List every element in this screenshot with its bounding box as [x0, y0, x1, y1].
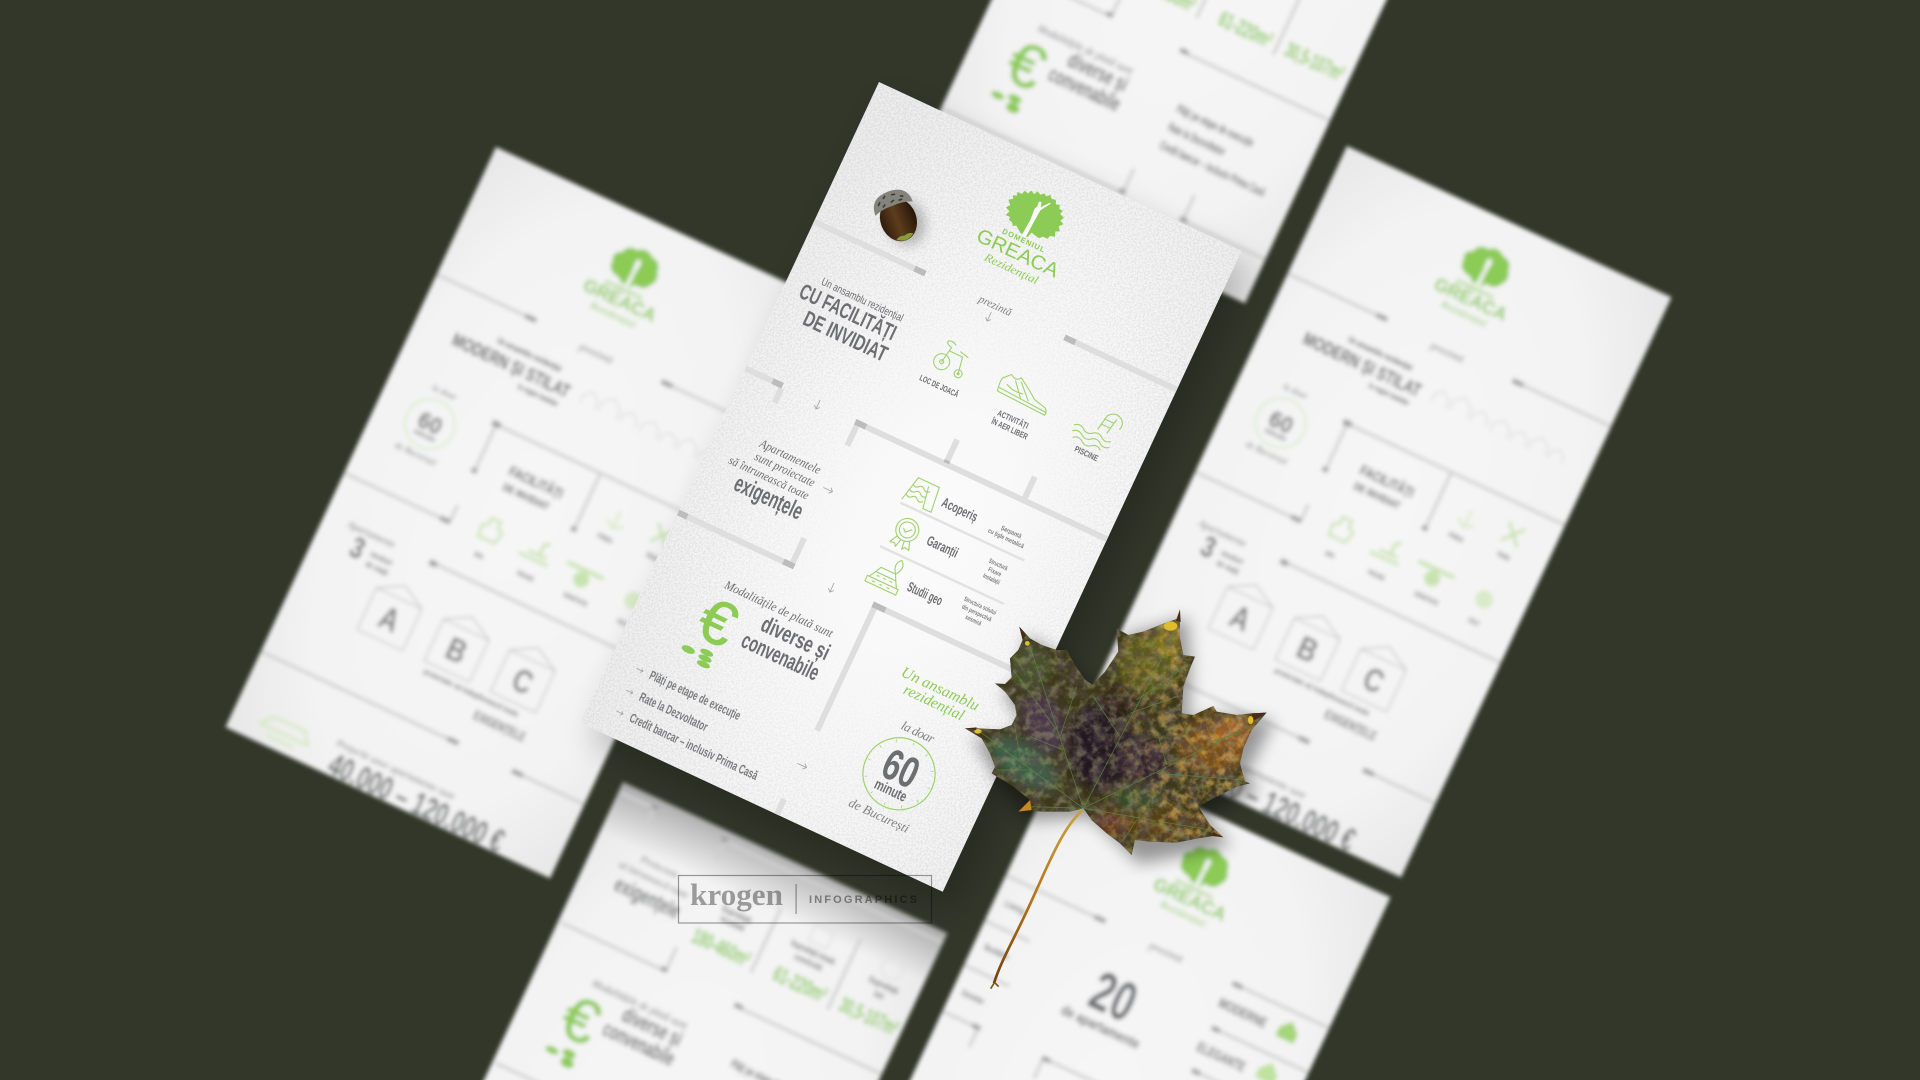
leaf shadow	[972, 618, 1274, 864]
soil text: din perspectivă	[961, 604, 993, 624]
3 types	[347, 520, 396, 577]
soil text: Structura solului	[963, 596, 997, 617]
requirements text: sunt proiectate	[752, 449, 818, 490]
payment list: Rate la Dezvoltator	[1166, 119, 1228, 159]
label: outdoor: ÎN AER LIBER	[989, 415, 1030, 442]
column labels: locuibilă	[719, 913, 747, 934]
blurred sheet: left, type A	[223, 147, 820, 884]
icon labels: FITNESS	[596, 533, 613, 546]
60 minutes circle: 60	[414, 406, 447, 440]
wordmark: DOMENIUL	[1001, 227, 1047, 254]
icon: tricycle	[931, 338, 973, 379]
payment heading	[571, 975, 692, 1071]
house caption: proiectate să îndeplinească toate	[1273, 666, 1371, 718]
heading: în regim hotelier	[1366, 381, 1411, 408]
facilities heading: FACILITĂȚI	[1357, 462, 1417, 502]
euro icon: €	[687, 584, 747, 661]
arrow down	[827, 582, 837, 593]
watermark frame	[678, 876, 932, 923]
payment heading: convenabile	[1044, 61, 1125, 117]
green values: 180-460m²	[688, 923, 755, 972]
prezinta: prezintă	[976, 293, 1014, 319]
house A	[356, 584, 424, 652]
icon labels: FITNESS	[1447, 532, 1464, 545]
requirements text: Apartamentele	[757, 436, 824, 477]
house B	[424, 616, 490, 682]
soil text	[905, 572, 997, 631]
logo: Rezidențial	[1438, 298, 1489, 330]
cast shadow at the top of the sheet	[600, 782, 947, 983]
payment heading: Modalitățile de plată sunt	[589, 975, 690, 1032]
watermark	[678, 876, 932, 923]
60 minutes circle: de București	[1244, 439, 1290, 467]
60 minutes circle: 60	[1265, 405, 1298, 439]
heading: Un ansamblu rezidențial	[1347, 334, 1414, 373]
green values: 61-220m²	[769, 961, 831, 1008]
house caption: proiectate să îndeplinească toate	[422, 667, 520, 719]
skyline	[1430, 385, 1569, 464]
maple leaf	[960, 603, 1274, 989]
house caption: EXIGENȚELE	[471, 707, 528, 745]
euro icon	[989, 42, 1050, 116]
bar end caps	[677, 218, 1077, 638]
60 minutes circle: la doar	[431, 382, 459, 403]
green values	[688, 923, 903, 1041]
frame bars	[580, 218, 1178, 892]
column labels: lot	[872, 988, 886, 1002]
price: Prețurile unor apartamente sunt	[333, 738, 456, 803]
arrow down	[984, 311, 994, 322]
nut	[874, 193, 923, 247]
3 types: moduri	[369, 549, 394, 568]
car icon	[258, 714, 310, 749]
payment heading	[1036, 24, 1134, 113]
price: 40.000 – 120.000 €	[1174, 745, 1361, 858]
requirements text: să întrunească toate	[727, 453, 812, 503]
payment heading	[701, 577, 840, 686]
faint feature icons	[730, 885, 907, 983]
requirements text: exigențele	[730, 470, 807, 525]
3 types: Apartamente	[345, 519, 398, 551]
3 types: 3	[344, 531, 370, 566]
main sheet	[580, 82, 1242, 892]
logo: DOMENIUL	[1174, 878, 1215, 902]
mottling olive	[960, 603, 1270, 860]
moderne row: MODERNE	[1215, 994, 1270, 1032]
facilities heading: DE INVIDIAT	[1352, 480, 1402, 512]
icon labels: SPA	[1323, 550, 1335, 561]
payment heading: diverse și	[1064, 47, 1132, 97]
icon labels: PISCINĂ	[1366, 567, 1386, 583]
60 minutes circle: de București	[393, 440, 439, 468]
house B: B	[440, 630, 473, 671]
heading	[1300, 330, 1424, 407]
wordmark: krogen: krogen	[690, 877, 783, 912]
logo: Rezidențial	[587, 299, 638, 331]
leaf blade	[960, 603, 1270, 860]
bar end caps	[427, 312, 674, 779]
payment list: Rate la Dezvoltator	[637, 689, 710, 734]
arrow right	[796, 761, 808, 770]
60 minutes circle	[1244, 383, 1308, 466]
requirements text: exigențele	[610, 872, 684, 924]
twenty apartments	[1058, 950, 1167, 1053]
3 types: Apartamente	[1196, 518, 1249, 550]
logo	[1432, 244, 1512, 328]
wordmark: infographics: INFOGRAPHICS	[809, 894, 917, 906]
twenty apartments: de apartamente	[1058, 1002, 1142, 1053]
payment list: Plăți pe etape de execuție	[1174, 101, 1257, 150]
soil text: Studii geo	[905, 578, 945, 609]
blurred sheet: bottom left, payment section	[353, 782, 950, 1080]
clock 60 minute	[851, 726, 947, 822]
payment heading: diverse și	[757, 611, 834, 666]
blurred sheet: bottom right, apartments	[796, 746, 1390, 1080]
green tagline: Un ansamblu	[898, 664, 982, 715]
heading: MODERN ȘI STILAT	[449, 330, 573, 402]
3 types	[1198, 520, 1247, 576]
paper grain	[580, 82, 1242, 892]
60 minutes circle: minute	[412, 428, 436, 444]
list arrows	[616, 667, 644, 716]
requirements text: Proiectele	[637, 854, 680, 882]
warranty text: Instalații	[982, 573, 1001, 587]
icon: sneaker	[995, 371, 1055, 415]
prezinta: prezintă	[1427, 339, 1466, 366]
icon labels: TENIS	[1495, 551, 1511, 563]
heading: în regim hotelier	[515, 382, 560, 409]
icon: soil studies	[865, 550, 910, 595]
label: outdoor: ACTIVITĂȚI	[996, 408, 1030, 431]
logo: GREACA	[1431, 274, 1510, 325]
logo	[582, 245, 661, 329]
payment list: Credit bancar – inclusiv Prima Casă	[627, 710, 761, 783]
clock 60 minute: 60	[874, 739, 927, 799]
bar end caps	[1105, 10, 1190, 224]
cap	[869, 185, 913, 216]
requirements text	[606, 847, 696, 924]
left list: Bucătărie	[983, 942, 1010, 962]
wordmark: GREACA	[973, 225, 1063, 282]
clock 60 minute: minute	[872, 776, 910, 806]
payment list	[627, 668, 781, 783]
twenty apartments: 20	[1081, 958, 1147, 1034]
yellow tips	[974, 621, 1253, 812]
divider	[796, 884, 797, 914]
green values: 30,5-107m²	[1281, 37, 1348, 86]
heading: MODERN ȘI STILAT	[1300, 329, 1424, 401]
requirements text	[716, 427, 824, 525]
icon: pool	[1069, 400, 1125, 456]
column labels: Suprafață totală	[789, 938, 837, 967]
logo: DOMENIUL	[1455, 278, 1496, 302]
left list	[960, 898, 1031, 1008]
icon labels	[472, 532, 658, 628]
euro icon: €	[996, 27, 1056, 105]
label: pools: PISCINE	[1073, 444, 1100, 463]
house caption: EXIGENȚELE	[1322, 706, 1379, 744]
payment heading: diverse și	[618, 1002, 687, 1052]
veins	[980, 630, 1252, 840]
warranty text: Garanții	[924, 532, 961, 561]
facility icons	[1326, 510, 1527, 610]
heading facilities: CU FACILITĂȚI	[796, 279, 900, 345]
blurred sheet: top right, payment section	[937, 0, 1390, 306]
icon: medal	[888, 515, 923, 553]
payment list: Credit bancar – inclusiv Prima Casă	[1157, 137, 1268, 200]
heading: Un ansamblu rezidențial	[496, 335, 563, 374]
house A: A	[1224, 598, 1257, 639]
house C: C	[1357, 660, 1390, 701]
icon labels: GOLF	[616, 618, 630, 629]
green values	[1162, 0, 1348, 81]
green tagline: rezidențial	[901, 681, 967, 724]
label: playground: LOC DE JOACĂ	[918, 373, 960, 399]
3 types: 3	[1195, 530, 1221, 565]
label: outdoor	[989, 407, 1034, 442]
la doar: la doar	[899, 718, 938, 746]
facilities heading	[500, 464, 566, 511]
skyline	[579, 386, 718, 465]
prezinta: prezintă	[1146, 939, 1185, 966]
roof text: Șarpantă	[1000, 525, 1023, 540]
icon labels: SĂNĂTATE	[1413, 589, 1440, 608]
logo: GREACA	[580, 275, 659, 326]
column labels: Suprafață	[867, 974, 901, 997]
warranty text: Fixare	[987, 566, 1003, 579]
icon labels: TENIS	[644, 552, 660, 564]
logo: DOMENIUL	[604, 279, 645, 303]
colour patches	[981, 620, 1253, 839]
column labels	[715, 903, 902, 1007]
script: Rezidențial	[981, 251, 1040, 287]
facilities heading	[1352, 463, 1416, 510]
facilities heading: FACILITĂȚI	[506, 463, 566, 503]
euro icon: €	[550, 982, 610, 1059]
arrow down	[813, 399, 823, 410]
icon labels: PISCINĂ	[515, 568, 535, 584]
green values: 30,5-107m²	[835, 992, 903, 1041]
price	[326, 738, 508, 854]
bar end caps	[1278, 312, 1525, 778]
frame bars	[259, 273, 762, 806]
house B	[1274, 614, 1342, 682]
3 types: de viață	[1215, 558, 1241, 577]
logo	[968, 174, 1086, 293]
icon labels	[1324, 530, 1512, 627]
heading	[450, 331, 573, 408]
requirements text: să întrunească toate	[616, 859, 690, 902]
payment heading: convenabile	[738, 627, 824, 686]
60 minutes circle	[394, 384, 457, 466]
house C	[490, 646, 556, 714]
60 minutes circle: minute	[1263, 427, 1287, 443]
60 minutes circle: la doar	[1282, 381, 1310, 402]
warranty text: Structură	[987, 558, 1009, 573]
arrow right	[822, 485, 834, 494]
payment list: Plăți pe etape de execuție	[647, 668, 743, 723]
price: 40.000 – 120.000 €	[323, 746, 510, 859]
tree	[997, 180, 1072, 250]
logo: GREACA	[1150, 874, 1229, 925]
de Bucuresti: de București	[847, 795, 912, 836]
3 types: moduri	[1220, 548, 1245, 567]
icon labels: SĂNĂTATE	[562, 590, 589, 609]
house C: C	[506, 661, 539, 702]
mottling dark	[960, 603, 1270, 860]
logo: Rezidențial	[1157, 898, 1208, 930]
icon labels: GOLF	[1467, 617, 1481, 628]
house C	[1340, 645, 1408, 712]
bar end caps	[525, 804, 807, 1080]
payment heading: Modalitățile de plată sunt	[1035, 20, 1136, 78]
frame bars	[942, 0, 1330, 260]
car icon	[1108, 712, 1164, 752]
prezinta: prezintă	[576, 340, 615, 367]
frame bars	[1110, 272, 1613, 805]
frame bars	[933, 874, 1331, 1080]
heading facilities	[786, 270, 906, 367]
column labels: Suprafață	[720, 903, 754, 926]
stem	[991, 810, 1083, 989]
roof text	[938, 494, 1030, 550]
facilities heading: DE INVIDIAT	[501, 481, 551, 513]
roof text: cu țigle metalică	[987, 527, 1025, 550]
bar end caps	[971, 887, 1244, 1080]
soil text: seismică	[964, 614, 983, 628]
thin rules	[879, 501, 1025, 605]
paper	[580, 82, 1242, 892]
acorn	[869, 183, 932, 253]
nut tip	[896, 232, 915, 243]
left list: Dormitor	[960, 988, 986, 1007]
house B: B	[1291, 629, 1324, 670]
roof text: Acoperiș	[939, 494, 981, 525]
green values: 61-220m²	[1215, 6, 1277, 53]
warranty text	[922, 530, 1009, 587]
heading facilities: DE INVIDIAT	[799, 306, 892, 367]
price	[1170, 737, 1365, 858]
payment heading: Modalitățile de plată sunt	[722, 577, 836, 641]
logo	[1145, 832, 1249, 936]
center sheet shadow	[590, 100, 1252, 910]
icon labels: SPA	[472, 551, 484, 562]
frame bars	[495, 791, 946, 1080]
dark leaf tips	[965, 609, 1267, 837]
house A: A	[373, 599, 406, 640]
price: Prețurile unor apartamente sunt	[1184, 737, 1307, 802]
payment list	[1158, 102, 1267, 198]
house A	[1207, 584, 1274, 650]
mottling orange	[960, 603, 1270, 860]
3 types: de viață	[364, 559, 390, 578]
left list: Living	[1003, 898, 1027, 917]
facility icons	[475, 512, 670, 611]
icon: roof	[902, 475, 942, 512]
heading facilities: Un ansamblu rezidențial	[819, 276, 905, 325]
blurred sheet: right, type A	[1074, 146, 1671, 883]
column labels: construită	[793, 951, 825, 973]
